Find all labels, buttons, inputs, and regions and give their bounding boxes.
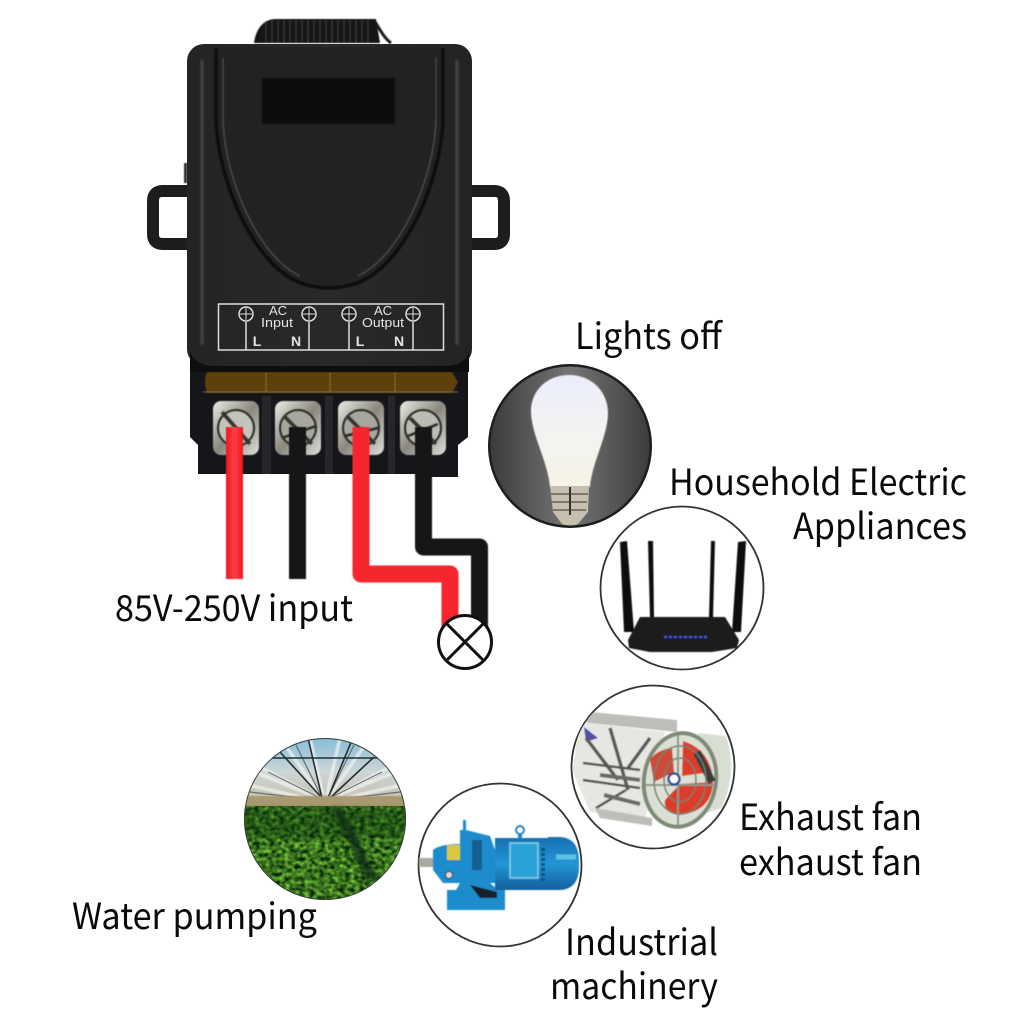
label: Industrial machinery: Industrial bbox=[565, 914, 718, 966]
terminal label panel: AC bbox=[269, 303, 287, 318]
terminal label panel: Output bbox=[362, 315, 404, 330]
photo: light bulb bbox=[488, 364, 652, 528]
wire: output neutral to lamp bbox=[424, 427, 480, 632]
label: Household Electric Appliances bbox=[669, 454, 967, 550]
indicator window bbox=[262, 78, 395, 124]
label: Household Electric Appliances: Household Electric bbox=[669, 454, 967, 506]
photo: blue gear motor bbox=[418, 784, 582, 946]
device: wireless relay receiver bbox=[153, 19, 504, 477]
label: Industrial machinery bbox=[550, 914, 718, 1010]
label: Exhaust fan exhaust fan: exhaust fan bbox=[739, 834, 922, 886]
terminal label panel: L bbox=[253, 333, 262, 349]
terminal label panel: L bbox=[356, 333, 365, 349]
terminal label panel: Input bbox=[261, 315, 293, 330]
icon: lamp symbol bbox=[438, 616, 492, 668]
terminal label panel bbox=[218, 303, 444, 350]
label: Household Electric Appliances: Appliances bbox=[793, 498, 967, 550]
label: 85V-250V input: 85V-250V input bbox=[115, 580, 353, 632]
label: Industrial machinery: machinery bbox=[550, 958, 718, 1010]
shield-shaped front panel bbox=[184, 48, 443, 288]
antenna coil bbox=[254, 19, 391, 43]
label: Water pumping: Water pumping bbox=[72, 888, 317, 940]
terminal label panel: N bbox=[394, 333, 404, 349]
wire: input neutral bbox=[289, 427, 306, 579]
wire: input live bbox=[226, 427, 243, 579]
amber terminal cover bbox=[203, 372, 458, 393]
mounting ear: right bbox=[470, 191, 504, 244]
mounting ear: left bbox=[153, 191, 188, 244]
label: Lights off: Lights off bbox=[575, 308, 724, 360]
terminal dividers bbox=[262, 396, 395, 474]
photo: greenhouse crops bbox=[243, 737, 407, 902]
label: Exhaust fan exhaust fan bbox=[739, 789, 922, 886]
label: Exhaust fan exhaust fan: Exhaust fan bbox=[739, 789, 922, 841]
main housing bbox=[187, 44, 472, 366]
terminal screws bbox=[213, 401, 446, 455]
terminal label panel: AC bbox=[374, 303, 392, 318]
wires bbox=[226, 427, 480, 632]
wire: output live to lamp bbox=[361, 427, 450, 632]
photo: exhaust fans bbox=[572, 686, 734, 848]
photo: wifi router bbox=[600, 506, 764, 670]
terminal label panel: N bbox=[291, 333, 301, 349]
housing ridges bbox=[202, 60, 457, 345]
terminal block base bbox=[190, 360, 468, 477]
